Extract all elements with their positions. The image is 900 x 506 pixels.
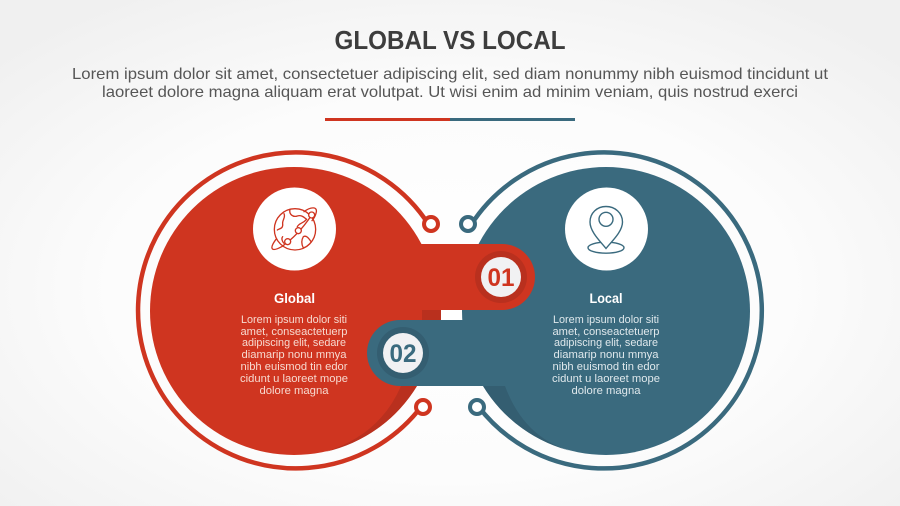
icon: location pin	[565, 188, 648, 270]
global circle shadow	[325, 386, 417, 452]
global heading: Global	[274, 291, 315, 306]
global text block: dolore magna	[260, 385, 328, 397]
local text block: adipiscing elit, sedare	[554, 337, 658, 349]
global text block	[240, 314, 348, 397]
title divider	[325, 118, 575, 121]
local ring bottom dot	[470, 400, 484, 414]
panel: local	[461, 152, 762, 468]
global text block: diamarip nonu mmya	[242, 349, 346, 361]
number badge 02: 02	[390, 340, 416, 368]
global text block: adipiscing elit, sedare	[242, 337, 346, 349]
local circle	[462, 167, 750, 455]
local text block: dolore magna	[572, 385, 640, 397]
local outer ring	[470, 152, 762, 468]
local heading: Local	[590, 291, 622, 306]
local circle shadow	[483, 386, 575, 452]
icon: globe with route	[253, 188, 336, 270]
panel: global	[138, 152, 438, 468]
global ring top dot	[424, 217, 438, 231]
intro text block	[72, 66, 829, 101]
global text block: cidunt u laoreet mope	[240, 373, 348, 385]
intro text block: Lorem ipsum dolor sit amet, consectetuer adipiscing elit, sed diam nonummy nibh euismod tincidunt ut	[72, 66, 829, 83]
connector band 02	[367, 320, 500, 386]
local text block	[552, 314, 660, 397]
global text block: nibh euismod tin edor	[240, 361, 348, 373]
local text block: amet, conseactetuerp	[552, 326, 660, 338]
local text block: nibh euismod tin edor	[552, 361, 660, 373]
global text block: Lorem ipsum dolor siti	[241, 314, 347, 326]
local text block: cidunt u laoreet mope	[552, 373, 660, 385]
intro text block: laoreet dolore magna aliquam erat volutpat. Ut wisi enim ad minim veniam, quis nostrud exerci	[102, 84, 798, 101]
number badge 01: 01	[488, 264, 515, 292]
local text block: Lorem ipsum dolor siti	[553, 314, 659, 326]
title: GLOBAL VS LOCAL	[334, 25, 566, 55]
connector band 01	[400, 244, 535, 310]
local text block: diamarip nonu mmya	[554, 349, 658, 361]
global outer ring	[138, 152, 429, 468]
local ring top dot	[461, 217, 475, 231]
connector notch	[422, 310, 462, 320]
global circle	[150, 167, 438, 455]
global ring bottom dot	[416, 400, 430, 414]
global text block: amet, conseactetuerp	[240, 326, 348, 338]
